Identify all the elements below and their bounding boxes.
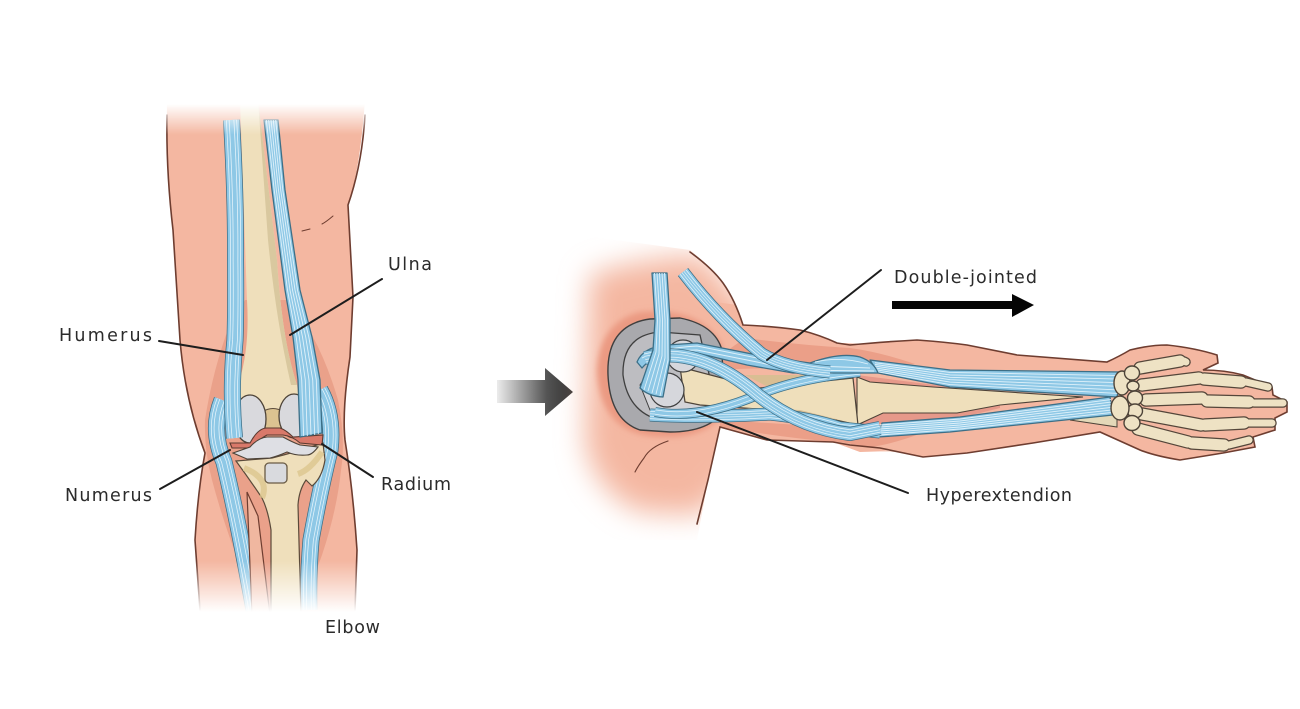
label: Numerus: Numerus — [65, 486, 152, 506]
lower forearm tendon — [878, 397, 1113, 437]
tibia — [236, 443, 325, 615]
upper right tendon — [264, 120, 322, 437]
forearm and hand skin — [850, 340, 1287, 460]
upper bone head — [667, 340, 699, 372]
label: Numerus — [65, 450, 230, 506]
label: Radium — [322, 444, 451, 495]
pink gap beside the forearm bone — [857, 375, 1000, 427]
meniscus — [233, 437, 318, 459]
panel: front view of the arm — [167, 100, 365, 615]
arm outline — [635, 252, 1287, 524]
tibia window — [265, 463, 287, 483]
skin silhouette — [167, 100, 365, 615]
upper forearm tendon — [870, 360, 1122, 397]
panel: extended arm — [585, 252, 1287, 524]
fibula — [247, 492, 270, 615]
darker tissue around the joint — [205, 300, 343, 615]
label: Humerus: Humerus — [59, 326, 152, 346]
darker tissue along the lower forearm — [720, 420, 925, 447]
right condyle — [278, 393, 300, 438]
label: Ulna — [290, 255, 432, 335]
label: Double-jointed: Double-jointed — [894, 268, 1037, 288]
arm outline — [167, 115, 365, 610]
lower tendons — [216, 390, 331, 610]
upper arm bone — [680, 367, 858, 425]
label: Radium: Radium — [381, 475, 451, 495]
darker tissue around the joint — [597, 311, 730, 437]
shoulder skin — [564, 244, 894, 532]
upper left tendon — [232, 120, 236, 438]
joint socket inner ring — [623, 332, 715, 420]
label: Ulna: Ulna — [388, 255, 432, 275]
label: Hyperextendion — [697, 412, 1072, 506]
arrow: black direction arrow — [892, 294, 1034, 317]
humerus bone — [240, 110, 298, 410]
darker tissue along the upper forearm — [700, 338, 915, 370]
joint tendons — [637, 272, 880, 434]
left condyle — [239, 394, 267, 442]
arrow: grey transition arrow — [497, 368, 573, 416]
third socket ring — [640, 370, 715, 417]
label: Elbow: Elbow — [325, 618, 380, 638]
lower forearm bone end — [1070, 412, 1117, 427]
condyle centre — [266, 408, 281, 428]
label: Hyperextendion: Hyperextendion — [926, 486, 1072, 506]
forearm bone — [857, 377, 1083, 425]
joint cartilage band — [230, 428, 323, 448]
label: Humerus — [59, 326, 243, 355]
hand bones — [1111, 361, 1283, 445]
label: Double-jointed — [767, 268, 1037, 360]
lower bone head — [650, 373, 684, 407]
vertical strap — [640, 273, 670, 397]
strap from the socket to the upper swoosh — [637, 343, 878, 373]
joint socket outer ring — [608, 318, 724, 432]
